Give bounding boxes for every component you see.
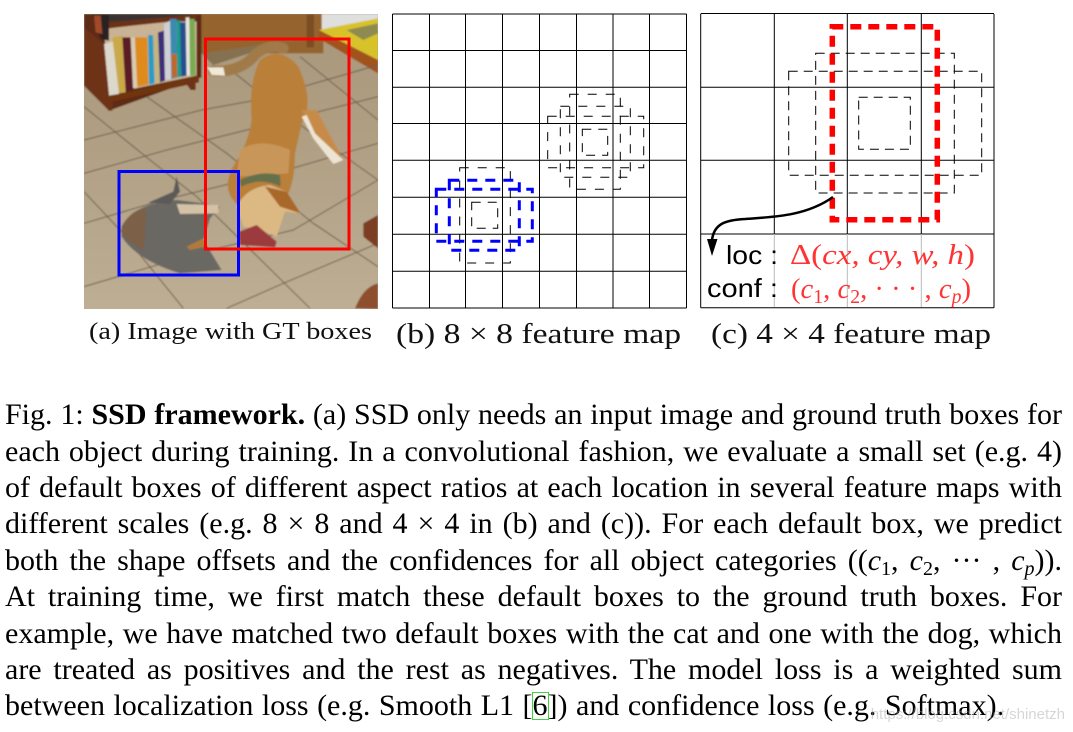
confidence scores: p — [950, 286, 961, 308]
watermark: https://blog.csdn.net/shinetzh — [871, 706, 1065, 723]
matched default box in red — [832, 27, 937, 220]
faded grid lines behind labels — [774, 234, 921, 307]
figure description text: At training time, we first match these default boxes to the ground truth boxes. For — [5, 580, 1062, 613]
confidence scores: 2 — [850, 286, 860, 308]
caption b: (b) 8 × 8 feature map — [396, 319, 681, 350]
default boxes on dog cell — [548, 94, 644, 189]
figure description text: example, we have matched two default boxes with the cat and one with the dog, which — [5, 617, 1062, 650]
blue ground truth box: cat — [119, 172, 238, 275]
figure description text: Fig. 1: SSD framework. (a) SSD only needs an input image and ground truth boxes for — [5, 398, 1062, 431]
figure description text: different scales (e.g. 8 × 8 and 4 × 4 in (b) and (c)). For each default box, we predict — [5, 507, 1062, 540]
confidence scores: , — [823, 273, 837, 305]
label conf: conf : — [707, 273, 778, 303]
figure description text: of default boxes of different aspect ratios at each location in several feature maps with — [5, 471, 1062, 504]
confidence scores: ) — [961, 273, 971, 305]
grid 8x8 — [392, 14, 686, 308]
default boxes — [789, 53, 982, 193]
confidence scores: 1 — [813, 286, 823, 308]
panel: 4x4 feature map — [701, 14, 994, 350]
panel: 8x8 feature map — [392, 14, 686, 350]
confidence scores: , · · · , — [860, 273, 939, 305]
default boxes on cat cell — [436, 168, 532, 263]
red ground truth box: dog — [206, 39, 349, 249]
confidence scores: c — [939, 273, 952, 305]
grid 4x4 — [701, 14, 994, 308]
arrow from box to predictions — [707, 197, 833, 256]
caption a: (a) Image with GT boxes — [89, 319, 372, 345]
label loc: loc : — [726, 240, 778, 270]
confidence scores: (c — [791, 273, 813, 305]
figure description text: between localization loss (e.g. Smooth L1 [6]) and confidence loss (e.g. Softmax). — [5, 689, 1004, 722]
figure description text: are treated as positives and the rest as negatives. The model loss is a weighted sum — [5, 653, 1062, 686]
figure description text: both the shape offsets and the confidences for all object categories ((c1, c2, ··· , cp)). — [5, 544, 1062, 580]
panel: image with ground truth boxes — [80, 10, 380, 345]
photo: dog and cat on tile floor — [80, 10, 380, 310]
confidence scores: c — [837, 273, 850, 305]
figure description text: each object during training. In a convolutional fashion, we evaluate a small set (e.g. 4) — [5, 435, 1062, 468]
caption c: (c) 4 × 4 feature map — [711, 319, 991, 350]
localization offsets: Δ(cx, cy, w, h ) — [790, 239, 975, 271]
